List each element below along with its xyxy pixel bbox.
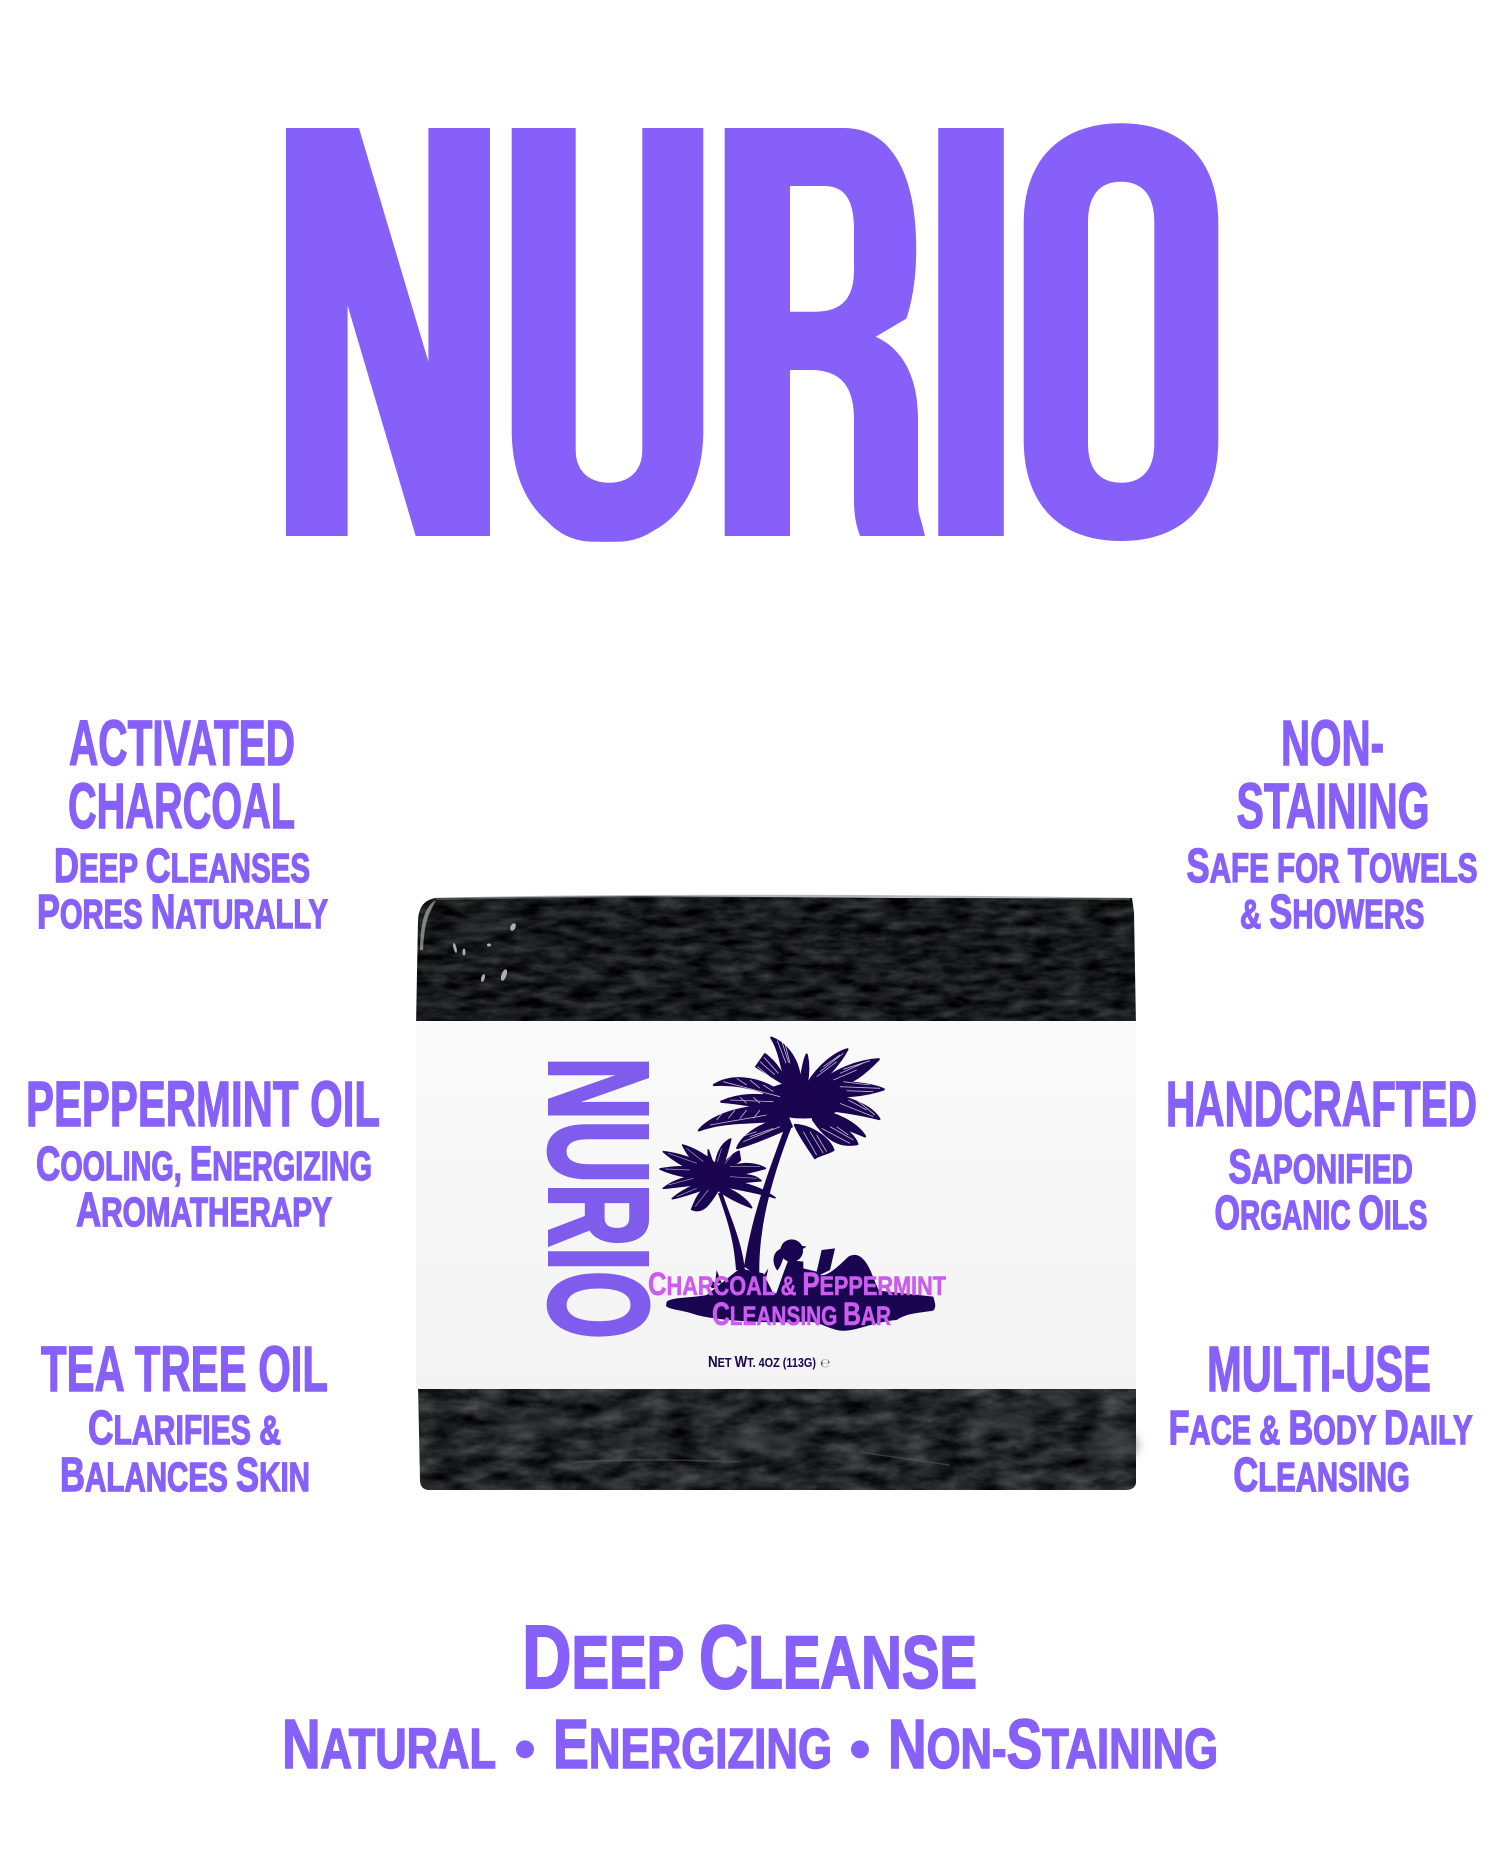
- footer tagline: •: [850, 1717, 870, 1781]
- feature: tea tree oil: CLARIFIES &: [88, 1402, 281, 1455]
- label text: product name: CHARCOAL & PEPPERMINT: [648, 1266, 946, 1302]
- title: NURIO: U: [506, 0, 709, 663]
- feature: multi-use: [1169, 1333, 1473, 1502]
- feature: multi-use: FACE & BODY DAILY: [1169, 1402, 1473, 1455]
- feature: multi-use: CLEANSING: [1233, 1449, 1410, 1502]
- feature: peppermint oil: COOLING, ENERGIZING: [36, 1138, 372, 1191]
- frond hatching: [710, 1040, 880, 1155]
- title: NURIO: [276, 0, 1218, 663]
- feature: peppermint oil: AROMATHERAPY: [76, 1184, 332, 1237]
- feature: activated charcoal: [37, 707, 328, 939]
- label logo: palm trees and reader: [660, 1038, 935, 1331]
- soap top: [416, 896, 1136, 1026]
- feature: tea tree oil: TEA TREE OIL: [41, 1333, 328, 1405]
- feature: non-staining: & SHOWERS: [1240, 886, 1424, 939]
- feature: peppermint oil: [26, 1068, 380, 1237]
- label text: net weight: ℮: [820, 1356, 830, 1370]
- footer tagline: •: [515, 1717, 535, 1781]
- feature: peppermint oil: PEPPERMINT OIL: [26, 1068, 380, 1140]
- soap surface detail: [420, 896, 1138, 1465]
- footer headline: DEEP CLEANSE: [522, 1608, 977, 1708]
- large palm: [699, 1038, 884, 1277]
- footer tagline: NON-STAINING: [888, 1705, 1218, 1783]
- label wordmark: NURIO vertical: NURIO: [520, 1057, 678, 1339]
- paper label band: [416, 1021, 1136, 1389]
- feature: activated charcoal: ACTIVATED: [69, 707, 295, 779]
- title: NURIO: N: [276, 1, 500, 663]
- feature: tea tree oil: [41, 1333, 328, 1502]
- feature: handcrafted: [1166, 1068, 1477, 1240]
- title: NURIO: O: [1025, 13, 1216, 652]
- feature: non-staining: [1186, 707, 1478, 939]
- feature: tea tree oil: BALANCES SKIN: [60, 1449, 310, 1502]
- footer tagline: [282, 1705, 1218, 1783]
- label text: product name: [648, 1266, 946, 1332]
- label text: product name: CLEANSING BAR: [712, 1296, 891, 1332]
- feature: activated charcoal: PORES NATURALLY: [37, 886, 328, 939]
- island: [666, 1268, 935, 1331]
- feature: activated charcoal: CHARCOAL: [68, 770, 295, 842]
- feature: handcrafted: SAPONIFIED: [1228, 1141, 1413, 1194]
- reader silhouette: [773, 1239, 883, 1302]
- feature: non-staining: NON-: [1281, 707, 1384, 779]
- feature: activated charcoal: DEEP CLEANSES: [54, 840, 310, 893]
- title: NURIO: I: [929, 0, 1013, 662]
- label text: net weight: NET WT. 4OZ (113G): [708, 1354, 816, 1371]
- product: soap bar: [416, 896, 1138, 1490]
- footer tagline: NATURAL: [282, 1705, 496, 1783]
- feature: handcrafted: ORGANIC OILS: [1214, 1187, 1428, 1240]
- small palm: [660, 1139, 775, 1270]
- footer tagline: ENERGIZING: [553, 1705, 832, 1783]
- soap bottom: [418, 1385, 1136, 1490]
- title: NURIO: R: [717, 1, 921, 662]
